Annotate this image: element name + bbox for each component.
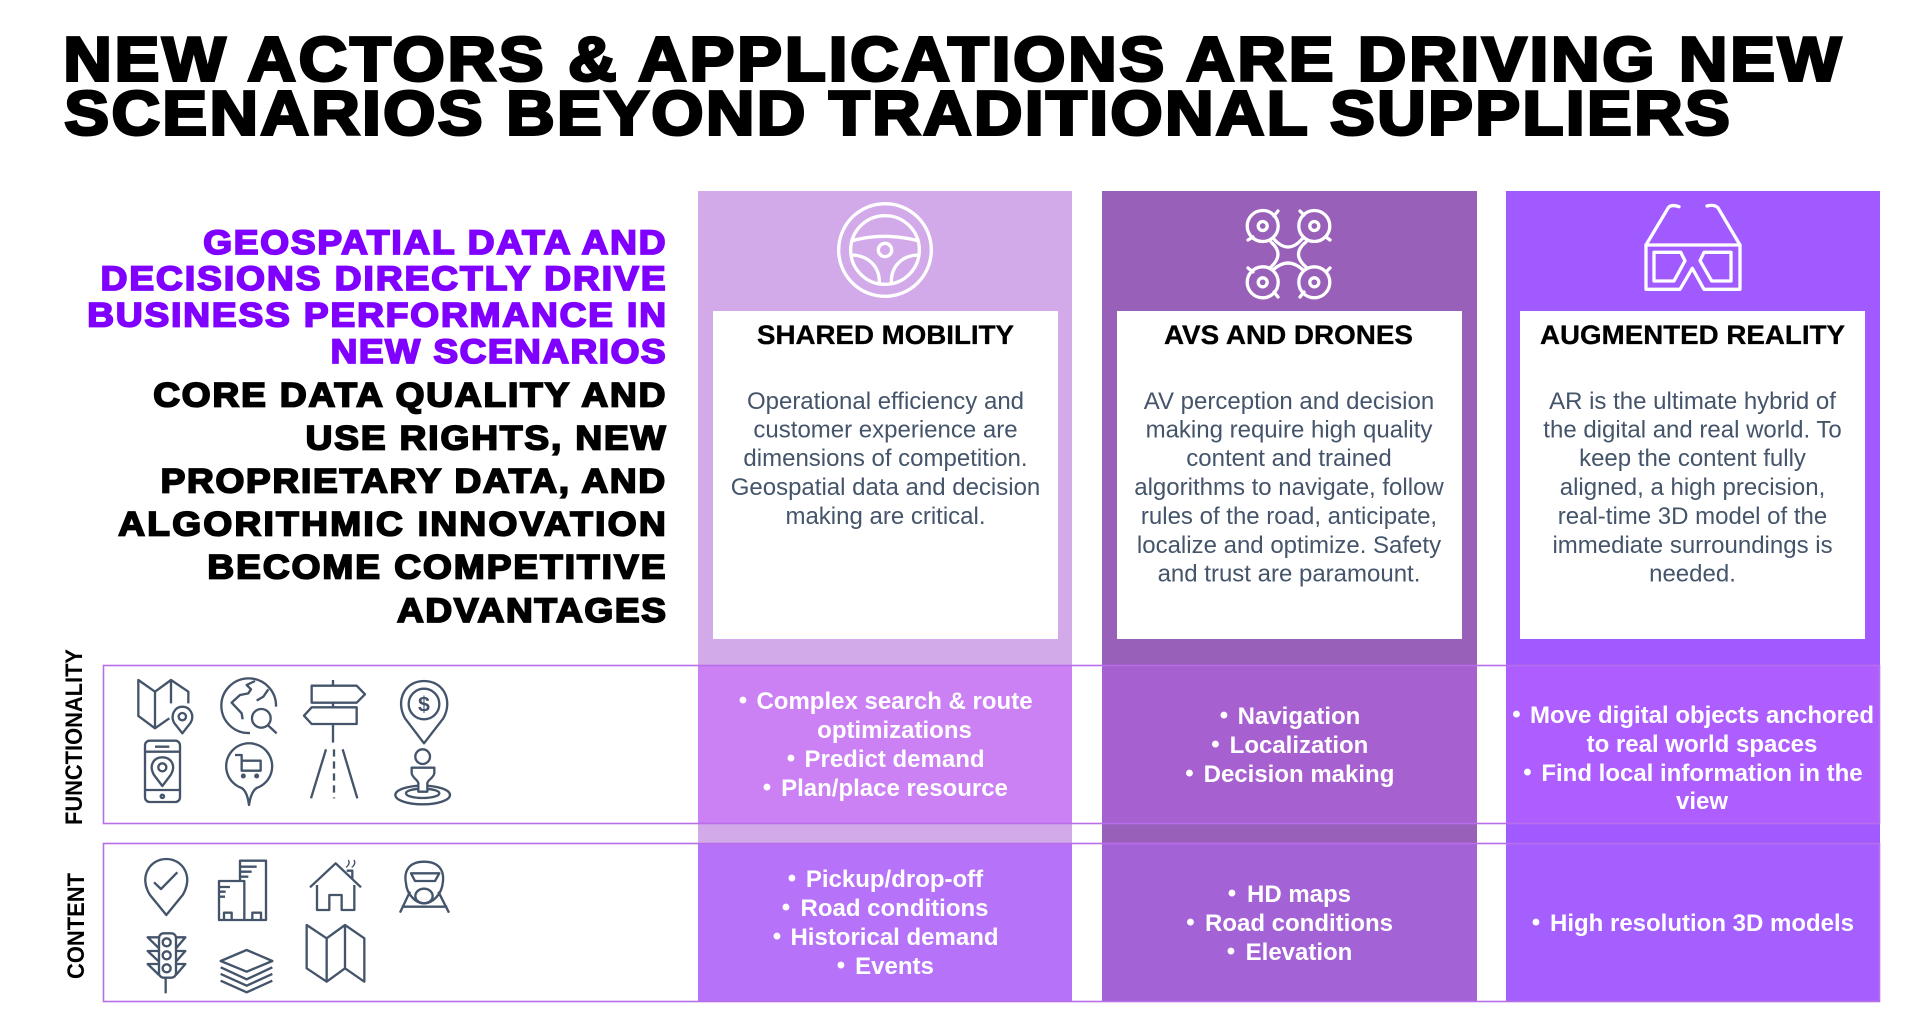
list: AVs and drones functionality: • [1220,702,1228,729]
purple subheading: GEOSPATIAL DATA AND [203,224,665,262]
text: AVs and drones description: and trust are paramount. [1158,560,1420,588]
icon: check pin [145,859,187,915]
list: AVs and drones functionality [1185,702,1394,788]
text: augmented reality description: keep the content fully [1579,445,1806,472]
icon: layers [221,950,272,992]
text: shared mobility description: customer experience are [753,416,1018,444]
list: AVs and drones functionality: • [1185,760,1194,787]
black subheading [118,376,666,630]
list: shared mobility functionality: optimizations [817,717,972,744]
icon: train [400,862,449,913]
list: AVs and drones functionality: Localization [1230,732,1368,759]
black subheading: BECOME COMPETITIVE [207,548,665,586]
list: shared mobility functionality: Complex search & route [756,688,1033,715]
list: AVs and drones functionality: • [1211,731,1220,758]
list: shared mobility content: Historical demand [790,924,999,951]
list: AVs and drones content: • [1228,880,1236,907]
list: augmented reality functionality: Move digital objects anchored [1530,702,1874,729]
panel: AVs and drones column [1102,191,1477,1002]
text: AVs and drones description: algorithms to navigate, follow [1134,474,1444,501]
icon: phone with pin [145,741,180,802]
list: augmented reality functionality: Find local information in the [1541,760,1863,787]
list: shared mobility functionality: • [787,745,795,772]
text: AVs and drones description: AV perception and decision [1144,388,1434,415]
list: augmented reality functionality: • [1523,759,1532,786]
icon group: functionality and content icons [138,678,450,993]
purple subheading: DECISIONS DIRECTLY DRIVE [101,260,666,298]
title: SCENARIOS BEYOND TRADITIONAL SUPPLIERS [64,79,1730,148]
black subheading: USE RIGHTS, NEW [306,419,666,457]
list: augmented reality content: • [1532,909,1540,936]
list: AVs and drones content [1186,880,1393,966]
text: shared mobility description: making are critical. [785,503,986,530]
icon: drone [1247,210,1330,298]
list: shared mobility content: • [788,865,796,892]
text: AVs and drones description: rules of the road, anticipate, [1141,503,1437,530]
list: shared mobility functionality: Plan/place resource [781,775,1008,802]
icon: dollar pin [401,681,447,743]
purple subheading: BUSINESS PERFORMANCE IN [87,296,666,334]
text: AVs and drones description: localize and optimize. Safety [1137,532,1441,559]
list: AVs and drones content: Road conditions [1205,910,1393,937]
panel: augmented reality column [1506,191,1880,1002]
list: augmented reality functionality: • [1512,701,1521,728]
text: AVs and drones description [1134,388,1444,588]
list: augmented reality functionality: view [1676,788,1728,815]
heading: shared mobility: SHARED MOBILITY [757,320,1014,350]
purple subheading [87,224,666,371]
icon: globe search [221,678,277,733]
list: AVs and drones content: • [1186,909,1195,936]
text: augmented reality description: immediate surroundings is [1552,532,1833,559]
icon: steering wheel [839,204,931,296]
text: shared mobility description: dimensions of competition. [743,445,1028,472]
text: augmented reality description: AR is the ultimate hybrid of [1549,388,1836,415]
icon: signpost [304,680,365,743]
text: augmented reality description [1543,388,1842,588]
icon: buildings [219,861,266,920]
list: augmented reality functionality [1512,701,1874,815]
icon: map with pin [138,680,192,733]
black subheading: PROPRIETARY DATA, AND [161,462,665,500]
list: shared mobility functionality: • [739,687,747,714]
icon: dollar pin: $ [418,693,430,717]
black subheading: ALGORITHMIC INNOVATION [118,505,666,543]
list: shared mobility content: Events [855,953,934,980]
list: shared mobility content: • [782,894,790,921]
heading: augmented reality: AUGMENTED REALITY [1540,320,1845,350]
title: NEW ACTORS & APPLICATIONS ARE DRIVING NEW [63,25,1841,94]
purple subheading: NEW SCENARIOS [331,333,666,371]
text: AVs and drones description: making require high quality [1146,416,1432,444]
content row frame [104,844,1880,1002]
icon: AR glasses [1646,205,1740,289]
icon: shopping cart bubble [226,743,272,805]
icon: house [310,860,361,910]
text: augmented reality description: needed. [1649,560,1736,588]
list: AVs and drones content: • [1227,938,1235,965]
icon: traffic light [148,933,185,993]
functionality row frame [104,666,1880,824]
title [63,25,1841,148]
list: augmented reality functionality: to real world spaces [1587,731,1817,758]
icon: folded map [307,925,364,982]
list: AVs and drones functionality: Navigation [1238,703,1360,730]
text: augmented reality description: the digital and real world. To [1543,416,1842,444]
text: shared mobility description: Operational efficiency and [747,388,1024,415]
list: shared mobility functionality: Predict demand [804,746,985,773]
list: AVs and drones functionality: Decision making [1204,761,1394,788]
list: shared mobility content: Road conditions [800,895,988,922]
black subheading: CORE DATA QUALITY AND [153,376,665,414]
text: shared mobility description [731,388,1040,530]
text: AVs and drones description: content and trained [1186,445,1392,472]
list: augmented reality content: High resolution 3D models [1550,910,1854,937]
panel: shared mobility column [698,191,1072,1002]
list: AVs and drones content: Elevation [1246,939,1352,966]
list: shared mobility functionality [739,687,1033,802]
icon: person on target [395,749,450,804]
list: shared mobility content [773,865,999,980]
list: shared mobility functionality: • [763,774,771,801]
list: shared mobility content: • [773,923,781,950]
text: shared mobility description: Geospatial data and decision [731,474,1040,501]
black subheading: ADVANTAGES [397,592,666,630]
list: shared mobility content: Pickup/drop-off [806,866,984,893]
label: functionality: FUNCTIONALITY [61,649,88,825]
label: content: CONTENT [63,873,90,979]
list: shared mobility content: • [837,952,845,979]
list: AVs and drones content: HD maps [1247,881,1351,908]
text: augmented reality description: real-time 3D model of the [1558,503,1827,530]
icon: road [311,749,357,798]
heading: AVs and drones: AVS AND DRONES [1164,320,1413,350]
text: augmented reality description: aligned, a high precision, [1560,474,1825,501]
